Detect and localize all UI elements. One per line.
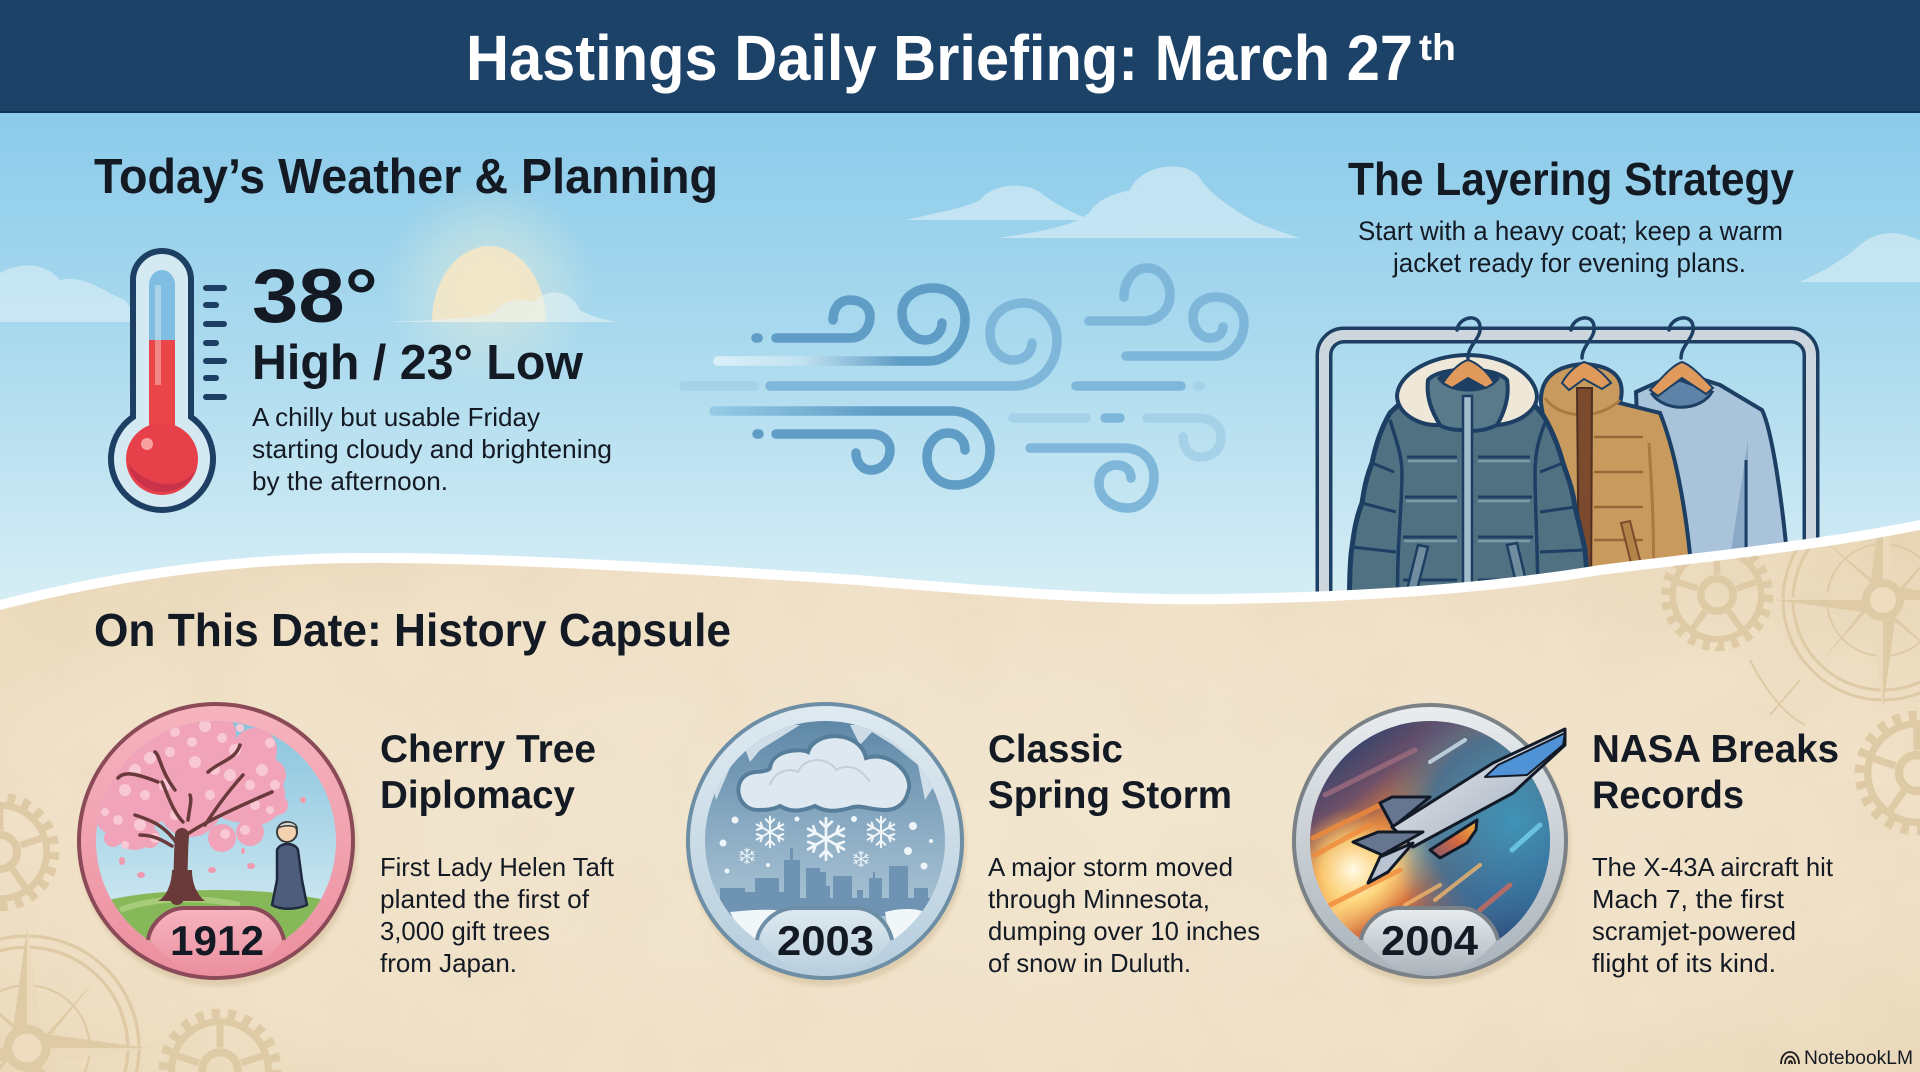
storm cloud [738, 736, 909, 811]
clothes rail [1324, 335, 1811, 610]
year band 2003: 2003 [777, 917, 874, 964]
heading: layering strategy: The Layering Strategy [1348, 153, 1794, 205]
sky background [0, 113, 1920, 603]
temperature low: High / 23° Low [252, 336, 584, 390]
text: cherry tree diplomacy: from Japan. [380, 948, 517, 978]
woman figure [272, 822, 307, 909]
text: cherry tree diplomacy [380, 728, 615, 978]
text: cherry tree diplomacy: 3,000 gift trees [380, 916, 550, 946]
text: classic spring storm [988, 728, 1260, 978]
text: cherry tree diplomacy: First Lady Helen Taft [380, 852, 615, 882]
zipper [1463, 396, 1472, 610]
weather description: by the afternoon. [252, 466, 448, 496]
text: NASA breaks records: Mach 7, the first [1592, 884, 1785, 914]
weather description [252, 402, 612, 496]
collar [1428, 370, 1508, 431]
medallion: 2004 NASA aircraft [1294, 705, 1570, 985]
text: NASA breaks records: NASA Breaks [1592, 728, 1839, 771]
text: classic spring storm: Spring Storm [988, 774, 1232, 817]
text: classic spring storm: dumping over 10 inches [988, 916, 1260, 946]
tree trunk and branches [118, 745, 272, 898]
hypersonic plane [1353, 729, 1565, 883]
year band 2003 [757, 908, 892, 976]
medallion: 1912 cherry tree [79, 704, 357, 986]
parchment lower panel with white wave edge [0, 520, 1920, 1072]
text: cherry tree diplomacy: Diplomacy [380, 774, 575, 817]
NotebookLM watermark: NotebookLM [1804, 1048, 1913, 1069]
text: cherry tree diplomacy: planted the first of [380, 884, 590, 914]
background gears and compass, lower left [0, 760, 400, 1072]
layering advice [1358, 216, 1783, 278]
sun with glow and cloud [384, 180, 617, 390]
weather description: starting cloudy and brightening [252, 434, 612, 464]
collar interior [1437, 370, 1500, 392]
title: Hastings Daily Briefing: March 27 [466, 22, 1413, 94]
text: cherry tree diplomacy: Cherry Tree [380, 728, 596, 771]
heading: history capsule: On This Date: History Capsule [94, 604, 731, 656]
sweater [1636, 372, 1790, 610]
text: NASA breaks records: The X-43A aircraft hit [1592, 852, 1834, 882]
year band 2004: 2004 [1381, 917, 1479, 964]
thermometer scale ticks [206, 288, 224, 397]
dark puffer jacket [1349, 355, 1588, 610]
year band 1912: 1912 [170, 917, 264, 964]
medallion: 2003 spring storm [688, 704, 966, 986]
year band 1912 [148, 908, 284, 976]
text: NASA breaks records: scramjet-powered [1592, 916, 1796, 946]
icon: thermometer [111, 251, 224, 510]
text: NASA breaks records [1592, 728, 1839, 978]
skyline [720, 848, 928, 900]
parchment mottling [0, 520, 1920, 1072]
header banner [0, 0, 1920, 113]
weather description: A chilly but usable Friday [252, 402, 540, 432]
title: th [1419, 27, 1456, 68]
text: classic spring storm: through Minnesota, [988, 884, 1210, 914]
tan jacket [1541, 364, 1694, 610]
decorative clouds [0, 166, 1920, 322]
icon: wind swirls [684, 268, 1244, 508]
text: classic spring storm: A major storm moved [988, 852, 1233, 882]
illustration: coat rack with layers [1324, 318, 1811, 610]
layering advice: jacket ready for evening plans. [1392, 248, 1746, 278]
hangers [1443, 318, 1713, 396]
blossom canopy [95, 709, 288, 852]
year band 2004 [1361, 908, 1498, 976]
text: classic spring storm: of snow in Duluth. [988, 948, 1191, 978]
background gears and compass, upper right [1661, 536, 1920, 836]
layering advice: Start with a heavy coat; keep a warm [1358, 216, 1783, 246]
text: NASA breaks records: flight of its kind. [1592, 948, 1776, 978]
temperature high: 38° [252, 254, 378, 339]
heading: today's weather: Today’s Weather & Planning [94, 150, 718, 204]
text: NASA breaks records: Records [1592, 774, 1744, 817]
fur hood [1397, 355, 1537, 425]
snow dots [720, 816, 933, 874]
text: classic spring storm: Classic [988, 728, 1123, 771]
